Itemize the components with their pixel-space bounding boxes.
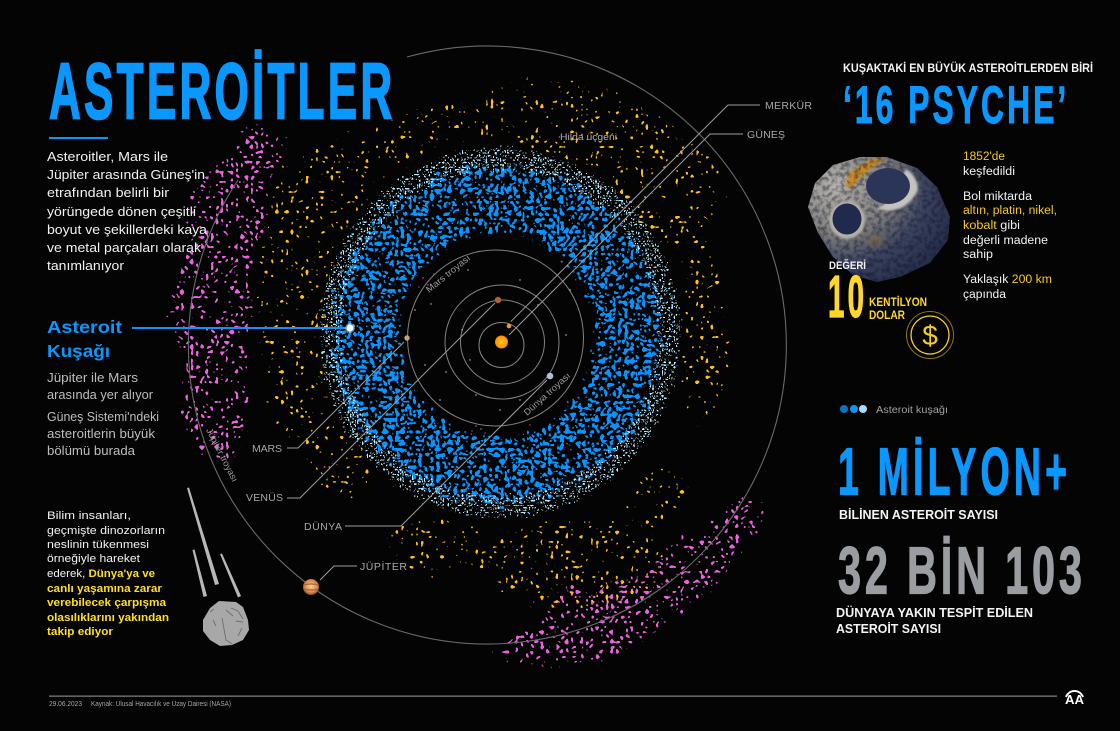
asteroid belt description: bölümü burada <box>47 444 135 458</box>
scatter: pale outer edge of the belt <box>331 159 669 507</box>
label: Merkür: MERKÜR <box>765 100 812 112</box>
stat: near-Earth asteroids: 32 BİN 103 <box>838 533 1082 608</box>
label: Jüpiter: JÜPİTER <box>360 560 407 573</box>
Psyche facts: Bol miktarda <box>963 191 1033 203</box>
Psyche facts: Yaklaşık 200 km <box>963 274 1052 286</box>
label: Hilda üçgeni: Hilda üçgeni <box>560 132 617 142</box>
scientists paragraph: Bilim insanları, <box>47 510 131 522</box>
legend: asteroid belt: Asteroit kuşağı <box>876 404 948 416</box>
Psyche facts: kobalt gibi <box>963 220 1020 232</box>
label: Mars troyası: Mars troyası <box>424 253 472 295</box>
background specks <box>414 269 571 411</box>
icon: Jupiter planet <box>303 579 319 595</box>
label: Jüpiter <box>320 560 407 580</box>
label: Mars: MARS <box>252 443 282 455</box>
icon: dollar coin: $ <box>922 320 938 351</box>
scientists paragraph: takip ediyor <box>47 626 114 638</box>
scatter: pink Jupiter trojans, lower cloud <box>485 485 763 666</box>
label: Güneş <box>509 129 785 335</box>
Psyche facts <box>963 151 1057 301</box>
scientists paragraph: canlı yaşamına zarar <box>47 583 163 595</box>
intro paragraph: Jüpiter arasında Güneş'in <box>47 168 205 182</box>
scatter: blue asteroid belt, small fragments <box>364 198 630 472</box>
intro paragraph: etrafından belirli bir <box>47 186 169 200</box>
Psyche heading: ‘16 PSYCHE’ <box>843 76 1066 135</box>
stat: known asteroids: 1 MİLYON+ <box>838 434 1067 509</box>
asteroid belt description: arasında yer alıyor <box>47 388 153 402</box>
asteroid belt description <box>47 371 159 458</box>
label: Mars <box>252 342 404 455</box>
scatter: blue asteroid belt, large fragments <box>364 198 630 472</box>
intro paragraph: Asteroitler, Mars ile <box>47 150 168 164</box>
label: Venüs: VENÜS <box>246 492 283 504</box>
Psyche value <box>828 259 927 330</box>
intro paragraph: tanımlanıyor <box>47 259 124 273</box>
title: ASTEROİTLER <box>49 47 392 136</box>
scientists paragraph <box>47 510 169 638</box>
Psyche facts: keşfedildi <box>963 166 1015 178</box>
scientists paragraph: olasılıklarını yakından <box>47 612 169 624</box>
asteroid belt description: asteroitlerin büyük <box>47 427 156 441</box>
asteroid belt description: Jüpiter ile Mars <box>47 371 138 385</box>
Venus <box>495 297 501 303</box>
icon: falling meteor <box>187 488 249 646</box>
stat: near-Earth asteroids: ASTEROİT SAYISI <box>836 621 941 636</box>
scientists paragraph: geçmişte dinozorların <box>47 525 165 537</box>
scientists paragraph: neslinin tükenmesi <box>47 539 149 551</box>
label: Venüs <box>246 303 495 504</box>
scientists paragraph: örneğiyle hareket <box>47 553 140 565</box>
footer date and source: Kaynak: Ulusal Havacılık ve Uzay Dairesi (NASA) <box>91 701 231 708</box>
inner solar system <box>404 250 584 434</box>
value label: DEĞERİ <box>829 259 866 272</box>
label: Jüpiter troyası: Jüpiter troyası <box>204 426 240 483</box>
icon: dollar coin <box>906 312 954 358</box>
value unit <box>869 296 927 322</box>
value number: 10 <box>828 264 864 330</box>
asteroid belt description: Güneş Sistemi'ndeki <box>47 410 159 424</box>
scientists paragraph: verebilecek çarpışma <box>47 597 167 609</box>
intro paragraph: yörüngede dönen çeşitli <box>47 205 196 219</box>
value unit: DOLAR <box>869 310 906 322</box>
Jupiter orbit <box>188 46 786 644</box>
label: Dünya: DÜNYA <box>304 521 342 533</box>
stat: known asteroids: BİLİNEN ASTEROİT SAYISI <box>839 507 998 522</box>
Mars <box>404 335 410 341</box>
Mercury <box>507 324 511 328</box>
Psyche subtitle: KUŞAKTAKİ EN BÜYÜK ASTEROİTLERDEN BİRİ <box>843 60 1093 75</box>
Mars and Earth troyans <box>418 273 531 434</box>
scientists paragraph: ederek, Dünya'ya ve <box>47 568 155 580</box>
Psyche facts: altın, platin, nikel, <box>963 205 1057 217</box>
footer rule <box>49 696 1057 697</box>
title underline <box>49 137 108 139</box>
belt pointer: line and highlighted dot <box>132 323 355 333</box>
Earth <box>547 373 553 379</box>
label: Dünya <box>304 380 547 533</box>
asteroid belt heading: Asteroit <box>47 317 122 337</box>
value unit: KENTİLYON <box>869 296 927 309</box>
scatter: gold Hilda triangle asteroids <box>257 57 731 613</box>
legend: asteroid belt <box>840 404 948 416</box>
intro paragraph <box>47 150 207 273</box>
sun <box>495 336 508 348</box>
intro paragraph: ve metal parçaları olarak <box>47 241 202 255</box>
asteroid belt heading: Kuşağı <box>47 341 110 361</box>
orbits <box>408 250 584 426</box>
scatter: pink Jupiter trojans, left cloud <box>170 120 288 467</box>
Psyche facts: sahip <box>963 249 993 261</box>
stat: near-Earth asteroids: DÜNYAYA YAKIN TESPİT EDİLEN <box>836 605 1033 620</box>
intro paragraph: boyut ve şekillerdeki kaya <box>47 223 207 237</box>
asteroid belt heading <box>47 317 122 361</box>
label: Güneş: GÜNEŞ <box>747 129 785 141</box>
Psyche facts: değerli madene <box>963 235 1048 247</box>
footer date and source: 29.06.2023 <box>49 701 82 708</box>
label: Dünya troyası: Dünya troyası <box>522 371 572 417</box>
label: Merkür <box>511 100 812 322</box>
Psyche facts: 1852'de <box>963 151 1005 163</box>
illustration: asteroid Psyche <box>808 157 950 282</box>
logo: AA: AA <box>1065 692 1085 707</box>
Psyche facts: çapında <box>963 289 1007 301</box>
